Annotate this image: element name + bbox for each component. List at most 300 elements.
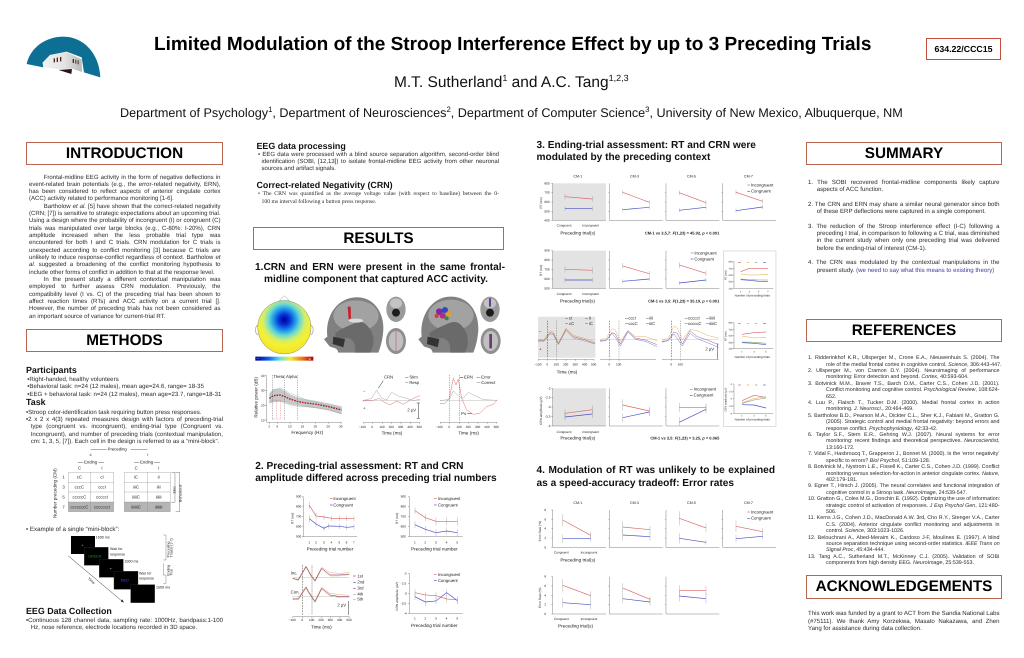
ERP waveforms row by context length: iiiiiI <box>709 316 715 321</box>
preceding and ending headers: C <box>78 466 81 471</box>
text: references: 402:179-181. <box>826 477 858 483</box>
ERP waveforms row by context length: − <box>539 329 541 334</box>
spectrum chart: 2 <box>268 425 270 428</box>
ERP chart: ERN error and correct: Ps <box>461 411 466 416</box>
text: references: cognitive control in a Stroop task. NeuroImage, 24:539-547. <box>826 490 967 496</box>
heading: references <box>806 318 1002 342</box>
ERP chart: ERN error and correct: 500 <box>494 425 499 429</box>
heading: methods: METHODS <box>86 332 163 349</box>
text: introduction: al. suggested a broadening of the conflict monitoring hypothesis to <box>29 262 220 268</box>
CRN amplitude line chart: CRN amplitude (µV) <box>395 582 399 611</box>
example mini-block screens: Wait for <box>110 547 123 551</box>
RT line chart: preceding trial number 1 to 7: 6 <box>346 541 347 544</box>
task design tables <box>52 447 183 603</box>
CRN amplitude line chart: Congruent <box>438 578 458 583</box>
row labels and brackets: 3 <box>62 485 65 490</box>
text: references: 12. Belouchrani A., Abed-Meraim K., Cardoso J-F, Moulines E. (1997). A blind <box>808 535 1000 541</box>
heading: result 1: midline component that captured ACC activity. <box>264 274 488 285</box>
subheading: task: Task <box>26 397 46 407</box>
ERP waveforms row by context length: cI <box>569 316 572 321</box>
text: participants: •EEG + behavioral task: n=24 (12 males), mean age=23.7, range=18-31 <box>27 391 221 398</box>
text: participants: •Right-handed, healthy volunteers <box>27 376 119 383</box>
spectrum chart: 25 <box>326 425 330 428</box>
ERP waveforms row by context length: 100 <box>616 363 621 366</box>
RT line chart: preceding trial number 1 to 5: 500 <box>401 535 406 539</box>
design table: preceding c: cI <box>100 475 104 480</box>
ERP waveforms row by context length: 0 <box>670 363 672 366</box>
ERP waveforms row by context length: cccccI <box>688 316 700 321</box>
RT line chart: preceding trial number 1 to 7: 4 <box>331 541 332 544</box>
RT chart row 1: CM-1, 3, 5, 7: CM-5 <box>687 175 696 179</box>
ERP waveforms row by context length: 200 <box>563 363 568 366</box>
RT chart row 2: CM-1, 3, 5: Congruent <box>557 292 572 296</box>
CRN amplitude chart row: CM-1, 3, 5: -2 <box>548 387 550 390</box>
RT chart row 1: CM-1, 3, 5, 7: Congruent <box>751 189 771 194</box>
colour bar: + <box>309 356 311 361</box>
ERP chart: incongruent and congruent by preceding trial: 0 <box>301 618 303 622</box>
error rate chart row 1: CM-1, 3, 5, 7: Error Rate (%) <box>538 521 542 541</box>
RT chart row 1: CM-1, 3, 5, 7: Congruent <box>557 224 572 228</box>
text: references: 2. Ullsperger M., von Cramon D.Y. (2004). Neuroimaging of performance <box>808 368 1000 374</box>
RT line chart: preceding trial number 1 to 5: 800 <box>401 505 406 509</box>
heading: result 4 <box>536 465 775 489</box>
ERP chart: incongruent and congruent by preceding trial: 4th <box>357 592 363 597</box>
RT chart row 2: CM-1, 3, 5: Preceding trial(s) <box>560 298 595 303</box>
ERP chart: incongruent and congruent by preceding trial: 2 µV <box>337 603 346 607</box>
RT chart row 1: CM-1, 3, 5, 7: CM-3 <box>630 175 639 179</box>
design table: preceding i: iiiC <box>133 485 139 490</box>
text: summary: preceding I trial, in comparison to following a C trial, was diminished <box>817 230 1000 237</box>
spectrum chart: Frequency (Hz) <box>291 430 323 435</box>
heading: introduction: INTRODUCTION <box>66 145 183 162</box>
ERP waveforms row by context length: cccccC <box>688 321 702 326</box>
ERP waveforms row by context length: Time (ms) <box>557 369 577 374</box>
text: introduction: Using a design where the probability of incongruent (I) or congruent (C) <box>29 218 220 224</box>
ERP chart: ERN error and correct <box>436 375 499 435</box>
text: EEG data processing: • EEG data were processed with a blind source separation algorithm, second-order blind <box>258 152 499 158</box>
inset chart: RT by number of preceding trials, 1 to 7: RT (ms) <box>724 270 727 280</box>
heading: result 1: 1.CRN and ERN were present in the same frontal- <box>255 262 505 273</box>
inset chart: RT by number of preceding trials, 1 to 5: 1 <box>741 351 743 353</box>
RT line chart: preceding trial number 1 to 7: Incongruent <box>333 496 356 501</box>
text: introduction: affect reaction times (RTs) and ACC activity on a current trial []. <box>29 299 220 305</box>
ERP chart: incongruent and congruent by preceding trial: Time (ms) <box>311 624 332 629</box>
text: references: monitoring versus selection-for-action in anterior cingulate cortex. Nature, <box>826 470 1000 476</box>
text: references: 3. Botvinick M.M., Braver T.S., Barch D.M., Carter C.S., Cohen J.D. (2001). <box>808 381 1000 387</box>
spectrum chart: Theta <box>273 374 284 379</box>
inset chart: CRN amplitude by number of preceding trials: 3 <box>753 415 755 417</box>
text: references: 11. Kerns J.G., Cohen J.D., MacDonald A.W. 3rd, Cho R.Y., Stenger V.A., Carter <box>808 515 1000 521</box>
text: introduction: compatibility level (I vs. C) of the preceding trial has been shown to <box>29 292 220 298</box>
CRN amplitude line chart: 4 <box>446 617 447 620</box>
RT line chart: preceding trial number 1 to 7: 2 <box>315 541 317 544</box>
design table: preceding c: cC <box>77 475 82 480</box>
RT line chart: preceding trial number 1 to 5: 700 <box>401 515 406 519</box>
RT line chart: preceding trial number 1 to 7: 7 <box>353 541 355 544</box>
ERP chart: incongruent and congruent by preceding trial: 200 <box>318 618 324 622</box>
design table: preceding i: iiiiiiiI <box>155 505 163 509</box>
inset chart: RT by number of preceding trials, 1 to 7: 3 <box>749 291 750 293</box>
error rate chart row 1: CM-1, 3, 5, 7: 2 <box>544 536 546 540</box>
ERP chart: ERN error and correct: Error <box>481 375 491 380</box>
RT chart row 2: CM-1, 3, 5 <box>539 249 719 303</box>
ERP chart: incongruent and congruent by preceding trial <box>289 565 364 629</box>
inset box outline <box>723 251 776 426</box>
inset chart: RT by number of preceding trials, 1 to 7: 400 <box>729 288 733 290</box>
text: acknowledgements: This work was funded by a grant to ACT from the Sandia National Labs <box>808 610 1000 617</box>
text: summary: 4. The CRN was modulated by the contextual manipulations in the <box>808 259 1000 266</box>
ERP chart: incongruent and congruent by preceding trial: 1st <box>357 574 363 578</box>
example mini-block screens: 1500 ms <box>96 536 110 540</box>
timeline brackets: Trial <box>170 569 174 576</box>
text: references: monitoring: Error detection and beyond. Cortex, 40:593-604. <box>826 374 969 380</box>
preceding and ending headers: Preceding <box>108 447 127 452</box>
example mini-block screens: 1500 ms <box>156 586 170 590</box>
section 3 charts: upper rows <box>539 175 776 426</box>
error rate chart row 2: CM-1, 3, 5: Incongruent <box>581 617 598 621</box>
text: summary: 3. The reduction of the Stroop interference effect (I-C) following a <box>808 223 1000 230</box>
design table: preceding c: cccccC <box>73 495 86 499</box>
heading: results: RESULTS <box>343 230 414 246</box>
poster number box: 634.22/CCC15 <box>934 44 992 54</box>
text: references: components from high density EEG. NeuroImage, 25:539-553. <box>826 560 974 566</box>
CRN amplitude line chart: Preceding trial number <box>411 623 458 628</box>
RT line chart: preceding trial number 1 to 7: Congruent <box>333 503 353 507</box>
ERP waveforms row by context length: iiiC <box>649 321 655 326</box>
example mini-block screens: Wait for <box>139 571 152 575</box>
ERP waveforms row by context length: 0 <box>608 363 610 366</box>
RT line chart: preceding trial number 1 to 7: 5 <box>338 541 340 544</box>
text: introduction: trials was manipulated over large blocks (e.g., C-80%: I-20%), CRN <box>29 226 220 232</box>
spectrum chart: 5 <box>276 425 278 428</box>
inset chart: RT by number of preceding trials, 1 to 7: Number of preceding trials <box>735 294 770 297</box>
error rate chart row 2: CM-1, 3, 5: 0 <box>544 612 546 616</box>
error rate chart row 1: CM-1, 3, 5, 7: CM-1 <box>573 501 582 505</box>
row labels and brackets: 1 <box>62 475 65 480</box>
affiliations: Department of Psychology1, Department of Neurosciences2, Department of Computer Science3, University of New Mexico, Albuquerque, NM <box>120 105 903 120</box>
text: references: 652. <box>826 394 836 400</box>
inset chart: RT by number of preceding trials, 1 to 7: 5 <box>758 291 759 293</box>
text: introduction: encountered for both I and C trials. CRN modulation for C trials is <box>29 240 220 246</box>
RT chart row 1: CM-1, 3, 5, 7: 500 <box>544 210 550 213</box>
heading: result 3 <box>536 140 756 163</box>
brain image: sagittal with coronal and axial insets, single source <box>324 297 406 354</box>
ERP waveforms row by context length: 400 <box>582 363 587 366</box>
heading: result 3: modulated by the preceding context <box>536 152 710 163</box>
heading: result 1 <box>255 262 505 285</box>
ERP chart: CRN stimulus and response locked: 400 <box>407 425 413 429</box>
text: summary: 1. The SOBI recovered frontal-midline components likely capture <box>808 179 1000 186</box>
inset chart: RT by number of preceding trials, 1 to 5: 600 <box>729 335 733 337</box>
text: introduction: employed to further assess CRN modulation. Previously, the <box>29 284 220 290</box>
colour bar <box>255 356 313 361</box>
brain image: sagittal with coronal and axial insets, multiple sources <box>418 297 501 354</box>
heading: methods <box>26 329 223 352</box>
text: acknowledgements: (#75111). We thank Amy Korzekwa, Masato Nakazawa, and Zhen <box>808 618 1000 625</box>
CRN amplitude chart row: CM-1, 3, 5: -2.5 <box>545 396 550 400</box>
head topography map <box>255 296 313 354</box>
poster number box <box>926 38 1001 60</box>
RT chart row 1: CM-1, 3, 5, 7: 600 <box>544 200 550 204</box>
text: introduction: has been considered to reflect aspects of anterior cingulate cortex <box>29 189 220 195</box>
row labels and brackets: Number preceding (CM) <box>52 468 58 518</box>
ERP waveforms row by context length: −100 <box>534 363 541 366</box>
text: references: Signal Proc, 45:434-444. <box>826 547 885 553</box>
ERP waveforms row by context length: 300 <box>573 363 578 366</box>
ERP chart: CRN stimulus and response locked <box>359 375 422 435</box>
design table: preceding i: iC <box>134 475 138 480</box>
inset chart: CRN amplitude by number of preceding trials: Number of preceding trials <box>735 418 770 421</box>
text: references: (2005). Strategic control and medial frontal negativity: beyond errors and <box>826 419 1000 425</box>
ERP chart: incongruent and congruent by preceding trial: 100 <box>309 618 314 622</box>
row labels and brackets <box>52 468 183 518</box>
design table: preceding i: iiiiiiiC <box>131 505 141 509</box>
design table: preceding c <box>68 472 114 512</box>
error rate chart row 1: CM-1, 3, 5, 7: Incongruent <box>581 551 598 555</box>
ERP chart: CRN stimulus and response locked: Stim <box>409 375 418 380</box>
ERP chart: incongruent and congruent by preceding trial: 500 <box>346 618 352 622</box>
subheading: participants: Participants <box>26 365 77 375</box>
ERP chart: incongruent and congruent by preceding trial: 5th <box>357 597 363 602</box>
spectrum chart: 30 <box>261 389 265 393</box>
example mini-block screens: 1500 ms <box>124 559 139 563</box>
spectrum chart <box>253 374 343 435</box>
text: correct-related negativity <box>258 191 499 205</box>
text: correct-related negativity: • The CRN was quantified as the average voltage value (with respect to baseline) between the 0- <box>258 191 499 197</box>
inset chart: CRN amplitude by number of preceding trials: -3 <box>730 398 732 400</box>
error rate chart row 2: CM-1, 3, 5: Congruent <box>554 617 569 621</box>
spectrum chart: 15 <box>301 425 304 428</box>
text: references: 4. Luu P., Flaisch T., Tucker D.M. (2000). Medial frontal cortex in action <box>808 400 1000 406</box>
text: mini-block example caption: • Example of a single “mini-block”: <box>26 526 119 532</box>
text: introduction: unexpected according to conflict monitoring [3] because C trials are <box>29 248 220 254</box>
RT chart row 2: CM-1, 3, 5: Congruent <box>694 257 714 261</box>
ERP waveforms row by context length: + <box>539 347 541 351</box>
RT line chart: preceding trial number 1 to 5: 1 <box>414 541 416 544</box>
inset chart: CRN amplitude by number of preceding trials: -2.5 <box>729 391 733 393</box>
text: introduction: However, the number of preceding trials has not been considered as <box>29 306 220 312</box>
timeline brackets: Trial(s) [1-7] <box>170 539 174 557</box>
ERP chart: ERN error and correct: 100 <box>456 425 462 429</box>
CRN amplitude chart row: CM-1, 3, 5: Preceding trial(s) <box>560 435 595 441</box>
timeline brackets: Ending <box>167 565 171 576</box>
authors: M.T. Sutherland1 and A.C. Tang1,2,3 <box>394 72 629 90</box>
text: participants <box>27 376 222 398</box>
RT line chart: preceding trial number 1 to 7: 800 <box>296 505 301 509</box>
title: Limited Modulation of the Stroop Interference Effect by up to 3 Preceding Trials <box>154 34 871 55</box>
ERP chart: ERN error and correct: 300 <box>475 425 480 429</box>
RT line chart: preceding trial number 1 to 5: 600 <box>401 525 406 529</box>
spectrum chart: 10 <box>261 419 265 422</box>
RT line chart: preceding trial number 1 to 7: 3 <box>323 541 325 544</box>
example mini-block screens <box>71 536 170 603</box>
inset chart: CRN amplitude by number of preceding trials: CRN amplitude (µV) <box>724 388 727 412</box>
ERP waveforms row by context length: 100 <box>554 363 559 366</box>
text: task: •2 x 2 x 4(3) repeated measures design with factors of preceding-trial <box>26 416 223 423</box>
RT chart row 2: CM-1, 3, 5: Incongruent <box>694 251 717 255</box>
text: introduction: In the present study a different contextual manipulation was <box>44 277 220 283</box>
RT chart row 1: CM-1, 3, 5, 7: CM-7 <box>744 175 753 179</box>
colour bar: − <box>256 356 259 361</box>
text: summary: aspects of ACC function. <box>817 186 883 193</box>
inset chart: CRN amplitude by number of preceding trials: -4 <box>730 413 732 415</box>
text: references: response conflict. Psychophysiology, 42:33-42. <box>826 426 937 432</box>
text: introduction: (CRN; [7]) is sensitive to strategic expectations about an upcoming trial. <box>29 211 221 217</box>
CRN amplitude chart row: CM-1, 3, 5 <box>539 387 719 441</box>
text: correct-related negativity: 100 ms interval following a button press response. <box>262 199 376 205</box>
inset chart: CRN amplitude by number of preceding trials: 1 <box>741 415 743 417</box>
CRN amplitude chart row: CM-1, 3, 5: -3 <box>548 405 550 409</box>
ERP chart: ERN error and correct: 400 <box>484 425 490 429</box>
example mini-block screens: + <box>110 566 112 571</box>
CRN amplitude chart row: CM-1, 3, 5: Incongruent <box>694 387 716 392</box>
design table: preceding i <box>124 472 170 512</box>
text: references: 9. Egner T., Hirsch J. (2005). The neural correlates and functional integration of <box>808 483 1000 489</box>
error rate chart row 1: CM-1, 3, 5, 7: 8 <box>544 508 546 512</box>
timeline brackets: Preceding <box>167 542 171 557</box>
text: participants: •Behavioral task: n=24 (12 males), mean age=24.6, range= 18-35 <box>27 383 204 390</box>
text: EEG data processing <box>258 152 499 172</box>
ERP chart: CRN stimulus and response locked: 0 <box>371 425 373 429</box>
text: references: source separation technique using second-order statistics. IEEE Trans on <box>826 541 1000 547</box>
RT line chart: preceding trial number 1 to 5 <box>395 495 463 552</box>
ERP chart: incongruent and congruent by preceding trial: 300 <box>328 618 333 622</box>
heading: result 4: 4. Modulation of RT was unlikely to be explained <box>536 465 775 476</box>
text: references: 6. Taylor S.F., Stern E.R., Gehring W.J. (2007). Neural systems for error <box>808 432 1000 438</box>
RT chart row 1: CM-1, 3, 5, 7: 400 <box>544 219 550 222</box>
heading: acknowledgements <box>806 575 1002 598</box>
preceding and ending headers <box>78 447 160 471</box>
ERP waveforms row by context length: cC <box>569 321 574 326</box>
RT chart row 1: CM-1, 3, 5, 7: CM-1 vs 3,5,7: F(1,23) = 45.92, p < 0.001 <box>645 231 719 236</box>
spectrum chart: 20 <box>261 404 265 408</box>
heading: summary: SUMMARY <box>865 144 943 162</box>
error rate chart row 2: CM-1, 3, 5: Preceding trial(s) <box>558 623 593 629</box>
ERP waveforms row by context length: 500 <box>591 363 596 366</box>
text: references: 7. Vidal F., Hasbroucq T., Grapperon J., Bonnet M. (2000). Is the ‘error negativity’ <box>808 451 1000 457</box>
error rate chart row 1: CM-1, 3, 5, 7: Congruent <box>554 551 569 555</box>
error rate chart row 1: CM-1, 3, 5, 7: 0 <box>544 546 546 549</box>
ERP waveforms row by context length: iC <box>589 321 593 326</box>
inset chart: RT by number of preceding trials, 1 to 7: 700 <box>729 268 733 270</box>
design table: preceding c: cccI <box>98 485 106 490</box>
CRN amplitude chart row: CM-1, 3, 5: CRN amplitude (µV) <box>539 397 543 425</box>
ERP waveforms row by context length <box>534 316 719 374</box>
error rate chart row 2: CM-1, 3, 5: 4 <box>544 594 546 597</box>
heading: introduction <box>26 142 223 165</box>
text: summary: 2. The CRN and ERN may share a similar neural generator since both <box>808 201 1000 208</box>
RT chart row 2: CM-1, 3, 5: Incongruent <box>582 292 599 296</box>
text: introduction: include other forms of conflict in addition to that at the response level. <box>29 270 215 276</box>
RT chart row 1: CM-1, 3, 5, 7: CM-1 <box>573 175 582 179</box>
text: introduction: (ACC) activity related to performance monitoring [1-6]. <box>29 196 174 202</box>
text: introduction: event-related brain potentials (e.g., the error-related negativity, ERN), <box>29 182 220 188</box>
design table: preceding i: iI <box>158 475 160 480</box>
spectrum chart: 10 <box>288 425 292 428</box>
design table: preceding c: cccccccC <box>70 505 88 509</box>
RT chart row 2: CM-1, 3, 5: CM-1 vs 3,5: F(1,23) = 35.19, p < 0.001 <box>648 299 719 303</box>
text: references: Conflict monitoring and cognitive control. Psychological Review, 108:624- <box>826 387 1000 393</box>
RT line chart: preceding trial number 1 to 7: 600 <box>296 525 301 529</box>
ERP chart: ERN error and correct: Time (ms) <box>458 430 479 435</box>
preceding and ending headers: I <box>101 466 103 471</box>
text: summary <box>808 179 1000 274</box>
text: introduction: amplitude increased when the less probable trial type was <box>29 233 220 239</box>
CRN amplitude line chart: -2 <box>404 572 407 575</box>
ERP chart: ERN error and correct: ERN <box>464 375 473 380</box>
RT line chart: preceding trial number 1 to 5: 900 <box>401 495 406 499</box>
text: references: control. Science, 303:1023-1026. <box>826 528 904 534</box>
text: references: 506. <box>826 509 836 515</box>
text: EEG data collection: Hz, nose reference, electrode locations recorded in 3D space. <box>31 624 197 631</box>
error rate chart row 1: CM-1, 3, 5, 7: Preceding trial(s) <box>560 557 595 562</box>
text: EEG data collection: •Continuous 128 channel data, sampling rate: 1000Hz, bandpass:1-100 <box>26 617 223 624</box>
spectrum chart: 20 <box>314 425 317 428</box>
text: introduction: Frontal-midline EEG activity in the form of negative deflections in <box>44 174 220 180</box>
spectrum chart: Relative power (dB) <box>253 377 259 418</box>
inset chart: RT by number of preceding trials, 1 to 7: 7 <box>767 291 769 293</box>
heading: result 3: 3. Ending-trial assessment: RT and CRN were <box>536 140 756 150</box>
CRN amplitude line chart: 5 <box>456 617 458 620</box>
heading: result 2: 2. Preceding-trial assessment: RT and CRN <box>255 460 463 472</box>
heading: summary <box>806 142 1002 164</box>
CRN amplitude line chart: -4 <box>404 612 407 615</box>
inset chart: RT by number of preceding trials, 1 to 7 <box>724 261 773 297</box>
CRN amplitude line chart: -3.5 <box>401 602 406 605</box>
heading: acknowledgements: ACKNOWLEDGEMENTS <box>816 578 992 595</box>
RT chart row 2: CM-1, 3, 5: 900 <box>544 249 550 253</box>
CRN amplitude chart row: CM-1, 3, 5: Incongruent <box>582 430 599 434</box>
ERP chart: incongruent and congruent by preceding trial: Con. <box>291 590 300 595</box>
text: EEG data processing: sources and artifact signals. <box>262 166 336 172</box>
text: task: •Stroop color-identification task requiring button press responses. <box>26 409 201 416</box>
spectrum chart: Alpha <box>286 374 297 379</box>
CRN amplitude chart row: CM-1, 3, 5: -3.5 <box>545 415 550 419</box>
error rate chart row 1: CM-1, 3, 5, 7: Congruent <box>751 516 771 521</box>
inset chart: RT by number of preceding trials, 1 to 5: 500 <box>729 342 733 344</box>
ERP chart: incongruent and congruent by preceding trial: −100 <box>289 618 296 622</box>
preceding and ending headers: c <box>90 452 92 457</box>
subheading: EEG data collection: EEG Data Collection <box>26 606 112 616</box>
section 4 charts <box>538 501 776 629</box>
ERP waveforms row by context length: cccI <box>628 316 636 321</box>
CRN amplitude line chart <box>395 572 463 628</box>
error rate chart row 2: CM-1, 3, 5: 8 <box>544 575 546 579</box>
error rate chart row 2: CM-1, 3, 5: 6 <box>544 584 546 588</box>
CRN amplitude chart row: CM-1, 3, 5: Congruent <box>694 393 714 398</box>
RT line chart: preceding trial number 1 to 5: Congruent <box>438 503 458 507</box>
text: references: monitoring. J. Neurosci., 20:464-469. <box>826 406 914 412</box>
design table: preceding i: iiiI <box>157 485 161 490</box>
text: EEG data processing: identification (SOBI, [12,13]) to isolate frontal-midline EEG activity from other neuronal <box>262 159 499 165</box>
heading: result 2: amplitude differed across preceding trial numbers <box>255 473 497 484</box>
inset chart: RT by number of preceding trials, 1 to 7: 600 <box>729 274 733 277</box>
CRN amplitude line chart: -3 <box>404 592 407 595</box>
row labels and brackets: EEG <box>173 486 176 493</box>
text: summary: present study. (we need to say what this means to existing theory) <box>817 267 994 274</box>
RT chart row 1: CM-1, 3, 5, 7: 800 <box>544 182 550 185</box>
text: references: 13:160-172. <box>826 445 855 451</box>
preceding and ending headers: Ending <box>84 460 97 465</box>
CRN amplitude line chart: -2.5 <box>401 582 406 585</box>
RT chart row 1: CM-1, 3, 5, 7: RT (ms) <box>539 197 543 209</box>
example mini-block screens: RED <box>121 579 129 583</box>
error rate chart row 1: CM-1, 3, 5, 7: CM-3 <box>630 501 639 505</box>
RT chart row 2: CM-1, 3, 5: 600 <box>544 277 550 281</box>
heading: result 4: as a speed-accuracy tradeoff: Error rates <box>536 478 734 489</box>
example mini-block screens: + <box>81 543 84 548</box>
RT chart row 2: CM-1, 3, 5: RT (ms) <box>539 265 543 276</box>
